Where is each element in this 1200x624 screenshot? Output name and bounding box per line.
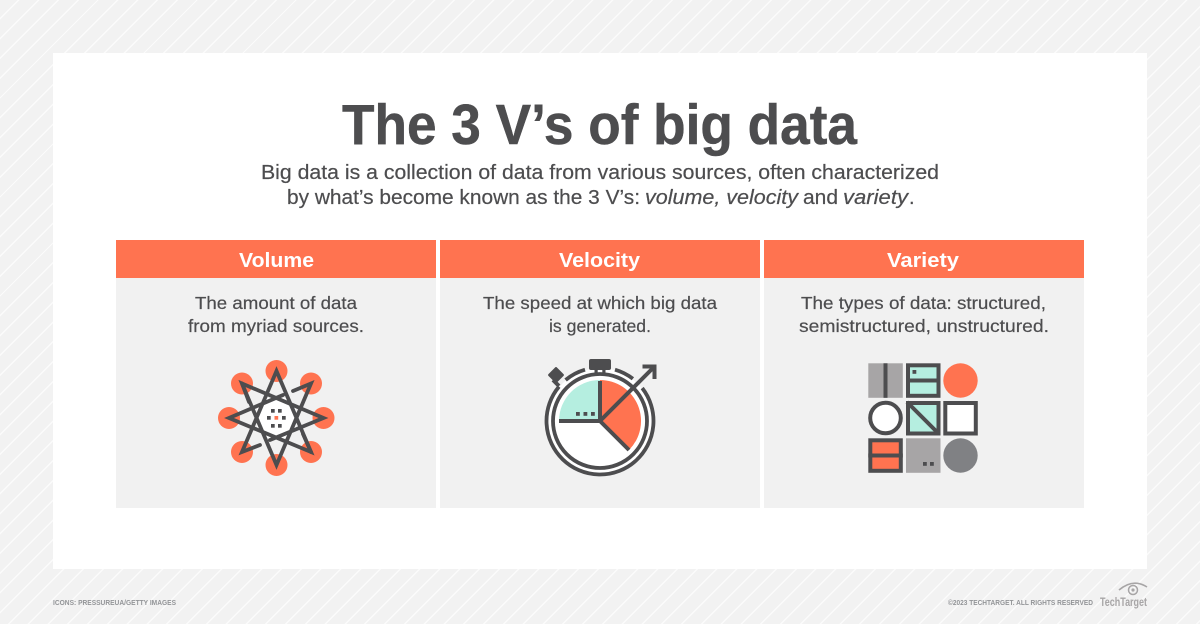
- velocity card background: [440, 278, 760, 508]
- panel: volume: [116, 240, 436, 508]
- copyright: ©2023 TECHTARGET. ALL RIGHTS RESERVED: [948, 599, 1093, 607]
- variety description: semistructured, unstructured.: [799, 316, 1049, 336]
- variety header bar: [764, 240, 1084, 278]
- icon: data sources star: [218, 360, 334, 476]
- volume heading: Volume: [239, 249, 314, 272]
- logo: TechTarget: [1100, 583, 1147, 609]
- velocity heading: Velocity: [559, 249, 641, 272]
- velocity header bar: [440, 240, 760, 278]
- logo: TechTarget: TechTarget: [1100, 595, 1147, 609]
- main white panel: [53, 53, 1147, 569]
- subtitle text block: .: [909, 187, 915, 209]
- volume description: The amount of data: [195, 293, 357, 313]
- panel: variety: [764, 240, 1084, 508]
- subtitle text block: Big data is a collection of data from various sources, often characterized: [261, 162, 939, 184]
- subtitle text block: [261, 162, 939, 209]
- velocity description: [483, 293, 717, 336]
- variety heading: Variety: [887, 249, 960, 272]
- velocity description: The speed at which big data: [483, 293, 717, 313]
- subtitle text block: variety: [843, 187, 909, 209]
- subtitle text block: volume, velocity: [645, 187, 799, 209]
- icon credit: ICONS: PRESSUREUA/GETTY IMAGES: [53, 600, 176, 607]
- volume header bar: [116, 240, 436, 278]
- subtitle text block: by what’s become known as the 3 V’s:: [287, 187, 640, 209]
- variety description: [799, 293, 1049, 336]
- icon: data type grid: [868, 363, 978, 473]
- icon: stopwatch: [546, 359, 654, 474]
- title: The 3 V’s of big data: [342, 93, 858, 157]
- variety description: The types of data: structured,: [801, 293, 1046, 313]
- subtitle text block: and: [803, 187, 838, 209]
- volume description: from myriad sources.: [188, 316, 364, 336]
- volume description: [188, 293, 364, 336]
- panel: velocity: [440, 240, 760, 508]
- volume card background: [116, 278, 436, 508]
- velocity description: is generated.: [549, 316, 651, 336]
- variety card background: [764, 278, 1084, 508]
